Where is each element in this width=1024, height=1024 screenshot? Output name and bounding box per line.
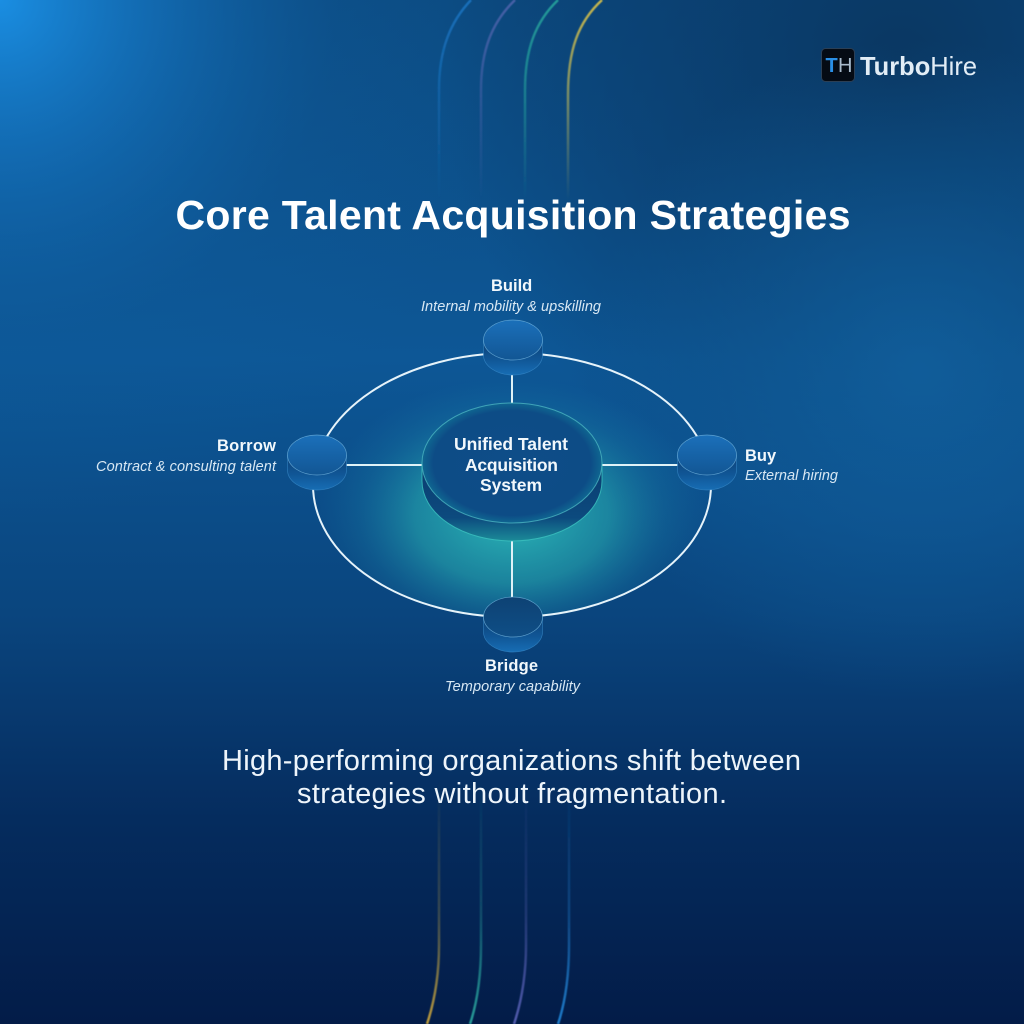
node: bridge — [484, 597, 542, 652]
label: buy — [745, 447, 838, 484]
title: Core Talent Acquisition Strategies — [176, 192, 850, 238]
central disc label: Unified Talent — [454, 434, 568, 454]
label: build: Build — [491, 277, 532, 295]
label: bridge: Bridge — [485, 657, 538, 675]
central glow — [314, 356, 710, 618]
node: buy — [678, 435, 736, 490]
label: buy: External hiring — [745, 468, 838, 484]
label: bridge: Temporary capability — [445, 679, 581, 695]
label: buy: Buy — [745, 447, 777, 465]
label: bridge — [445, 657, 581, 695]
outer ring — [313, 353, 711, 617]
central disc label: Acquisition — [465, 455, 558, 475]
closing statement: High-performing organizations shift between — [222, 745, 801, 777]
bottom flowing lines — [427, 780, 569, 1024]
logo wordmark: TurboHire — [860, 51, 977, 81]
label: borrow: Contract & consulting talent — [96, 459, 277, 475]
closing statement — [222, 745, 801, 810]
closing statement: strategies without fragmentation. — [297, 778, 727, 810]
top flowing lines — [439, 0, 602, 200]
logo badge: H — [838, 55, 852, 77]
spokes — [345, 370, 680, 600]
logo: TurboHire — [822, 48, 977, 82]
node: borrow — [288, 435, 346, 490]
central disc label — [454, 434, 568, 495]
logo badge — [822, 48, 854, 82]
node: build — [484, 320, 542, 375]
diagram: hub and spoke — [288, 320, 736, 652]
label: borrow: Borrow — [217, 437, 276, 455]
central disc — [422, 403, 602, 541]
label: borrow — [96, 437, 277, 475]
label: build: Internal mobility & upskilling — [421, 299, 601, 315]
logo badge: T — [826, 55, 838, 77]
central disc label: System — [480, 475, 542, 495]
label: build — [421, 277, 601, 315]
